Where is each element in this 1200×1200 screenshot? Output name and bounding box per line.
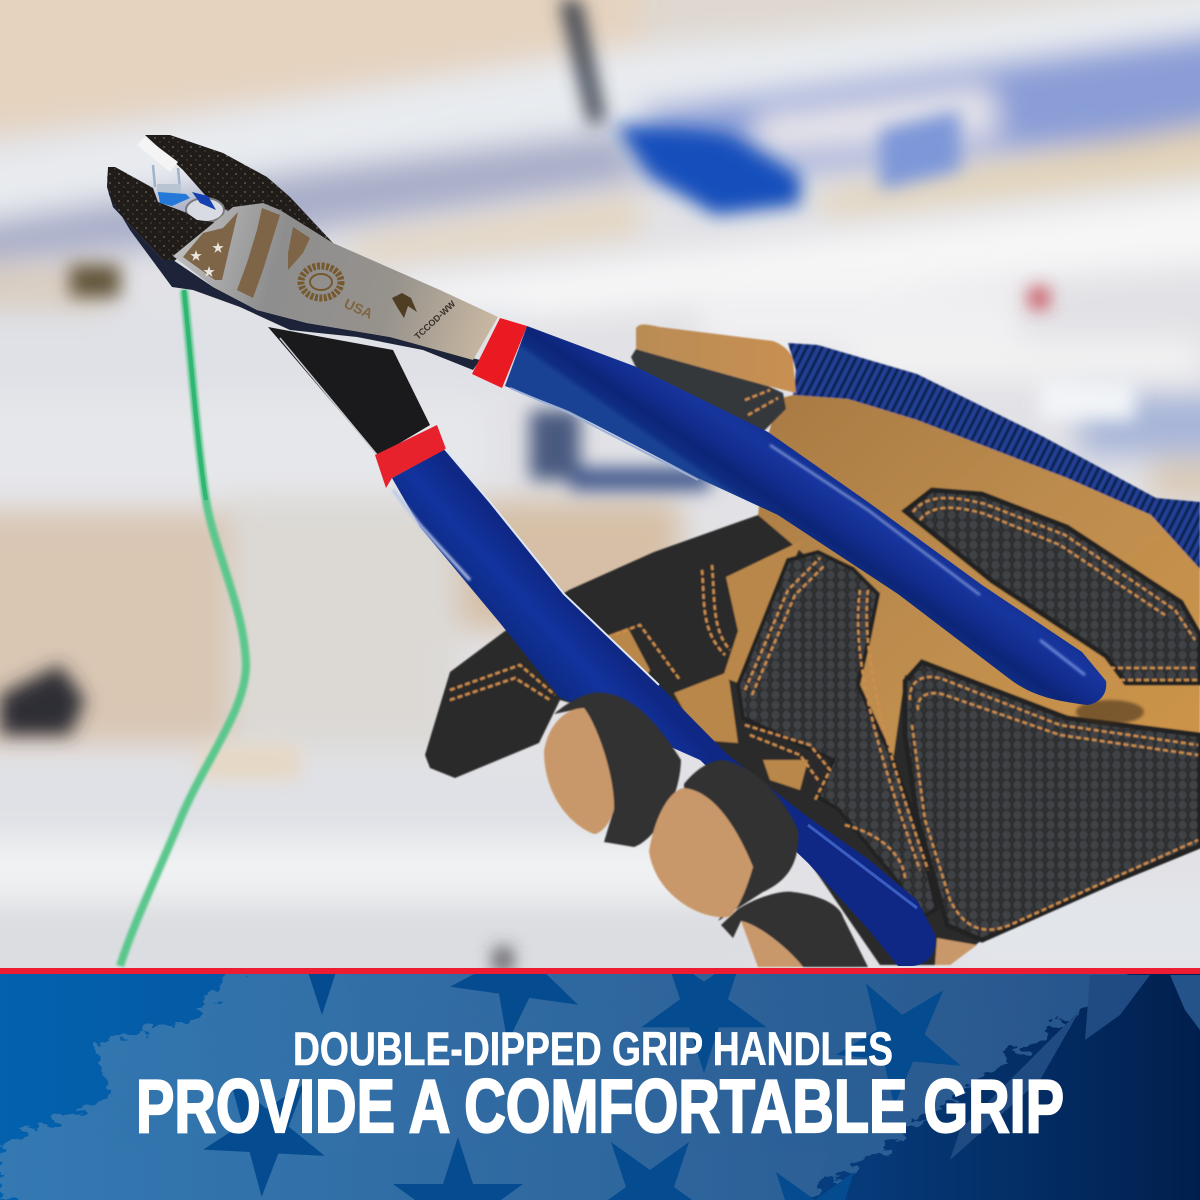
glove: blue knit back strip (788, 343, 1200, 569)
pliers: engraved USA mark: USA (342, 295, 375, 322)
pliers: upper jaw (145, 135, 333, 250)
glove: dark base silhouette (425, 515, 1200, 965)
finger one (544, 692, 681, 847)
pliers: engraved soldier logo (392, 293, 417, 318)
pliers: engraved flag stripes (183, 208, 310, 298)
banner brushed flag texture (0, 960, 1200, 1200)
upper blue handle (505, 326, 1106, 705)
glove: stitching (450, 390, 1198, 930)
finger three (721, 892, 868, 967)
green wire (120, 290, 246, 966)
upper handle red band (472, 318, 527, 388)
pliers: lower arm (268, 327, 430, 456)
lower handle red band (375, 425, 446, 488)
pliers: lower jaw (107, 167, 222, 262)
pliers: lower arm edge highlight (280, 338, 378, 456)
pliers: wire terminal clip (137, 137, 190, 206)
pliers: dark bevel edge (107, 175, 480, 370)
lower handle highlights (393, 449, 917, 908)
glove: lower palm pad (905, 662, 1200, 940)
glove: hexagon grip panel (738, 552, 937, 917)
bottom banner (0, 892, 1200, 1200)
banner background (0, 974, 1200, 1200)
glove: dark upper panel (905, 490, 1200, 683)
pliers (107, 135, 1106, 966)
glove: tan back of hand (758, 395, 1200, 760)
pliers: brushed steel head (173, 203, 498, 360)
finger two (649, 760, 798, 921)
glove: shadow beneath handle tip (1076, 700, 1144, 724)
banner stars (201, 892, 967, 1200)
lower blue handle (392, 449, 936, 966)
pliers: jaw cutout hole (186, 192, 224, 222)
glove: thumb fingertip (631, 324, 796, 432)
pliers: model number: TCCOD-WW (413, 298, 458, 341)
banner heading line one: DOUBLE-DIPPED GRIP HANDLES (293, 1022, 893, 1075)
pliers: engraved stars (190, 242, 224, 277)
pliers: engraved wreath (301, 266, 341, 298)
gloved hand (425, 324, 1200, 965)
banner flag texture and stars (0, 974, 1200, 1200)
upper handle highlights (510, 388, 1085, 675)
red divider (0, 968, 1200, 974)
gloved fingers over handle (544, 692, 868, 967)
glove: tan inner panels (609, 540, 808, 790)
glove: exposed palm edge (935, 938, 977, 965)
